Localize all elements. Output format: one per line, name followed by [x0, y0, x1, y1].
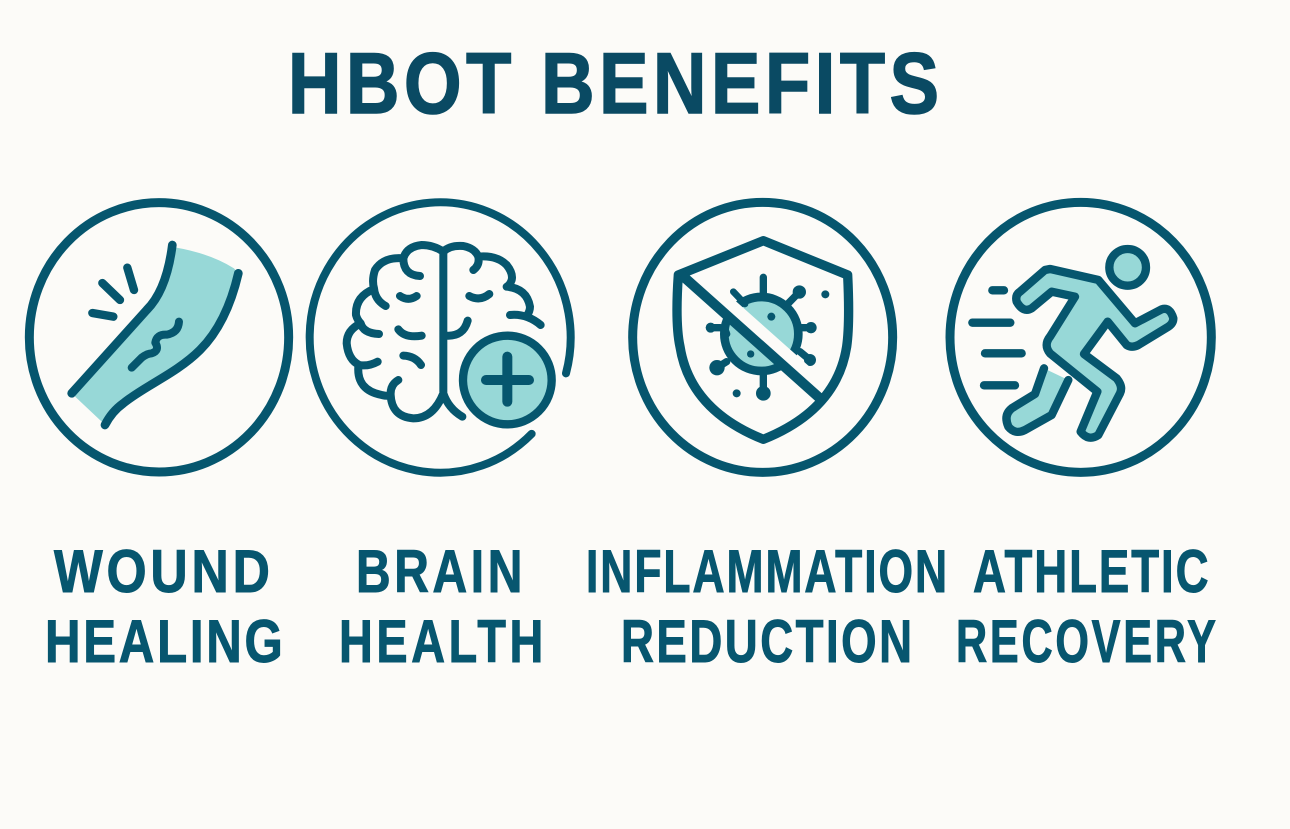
- label: brain health: HEALTH: [339, 608, 543, 675]
- label: inflammation reduction: REDUCTION: [621, 609, 912, 676]
- shield: [677, 241, 849, 439]
- ring: [29, 203, 289, 472]
- icon: athletic runner: [950, 202, 1211, 472]
- title: HBOT BENEFITS: [288, 35, 939, 131]
- virus spike tips: [706, 285, 829, 401]
- brain outline: [347, 245, 541, 418]
- top-left spike: [733, 292, 745, 304]
- slash: [682, 275, 820, 398]
- motion lines: [972, 290, 1022, 385]
- icon: wound healing arm: [29, 203, 289, 472]
- open ring: [310, 202, 571, 473]
- ring: [950, 202, 1211, 472]
- virus spikes: [711, 277, 811, 393]
- label: athletic recovery: [956, 539, 1216, 676]
- label: athletic recovery: ATHLETIC: [973, 539, 1209, 606]
- pain rays: [92, 268, 134, 317]
- virus body: [724, 297, 798, 371]
- back leg: [1006, 368, 1068, 432]
- label: wound healing: WOUND: [54, 537, 270, 605]
- label: wound healing: [45, 537, 283, 675]
- body: [1016, 269, 1173, 438]
- label: brain health: [339, 538, 543, 675]
- arm outlines: [72, 245, 238, 425]
- icon: brain health: [310, 202, 571, 473]
- arm fill: [72, 245, 238, 422]
- head: [1109, 249, 1146, 286]
- wound line: [132, 322, 179, 368]
- label: inflammation reduction: INFLAMMATION: [586, 539, 947, 606]
- icon: inflammation shield: [633, 202, 893, 472]
- virus inner dots: [747, 313, 775, 358]
- plus sign: [486, 357, 529, 402]
- label: inflammation reduction: [586, 539, 947, 676]
- ring: [633, 202, 893, 472]
- slash gap: [677, 257, 815, 380]
- plus badge: [463, 336, 552, 424]
- label: brain health: BRAIN: [356, 538, 522, 605]
- label: wound healing: HEALING: [45, 607, 283, 675]
- label: athletic recovery: RECOVERY: [956, 609, 1216, 676]
